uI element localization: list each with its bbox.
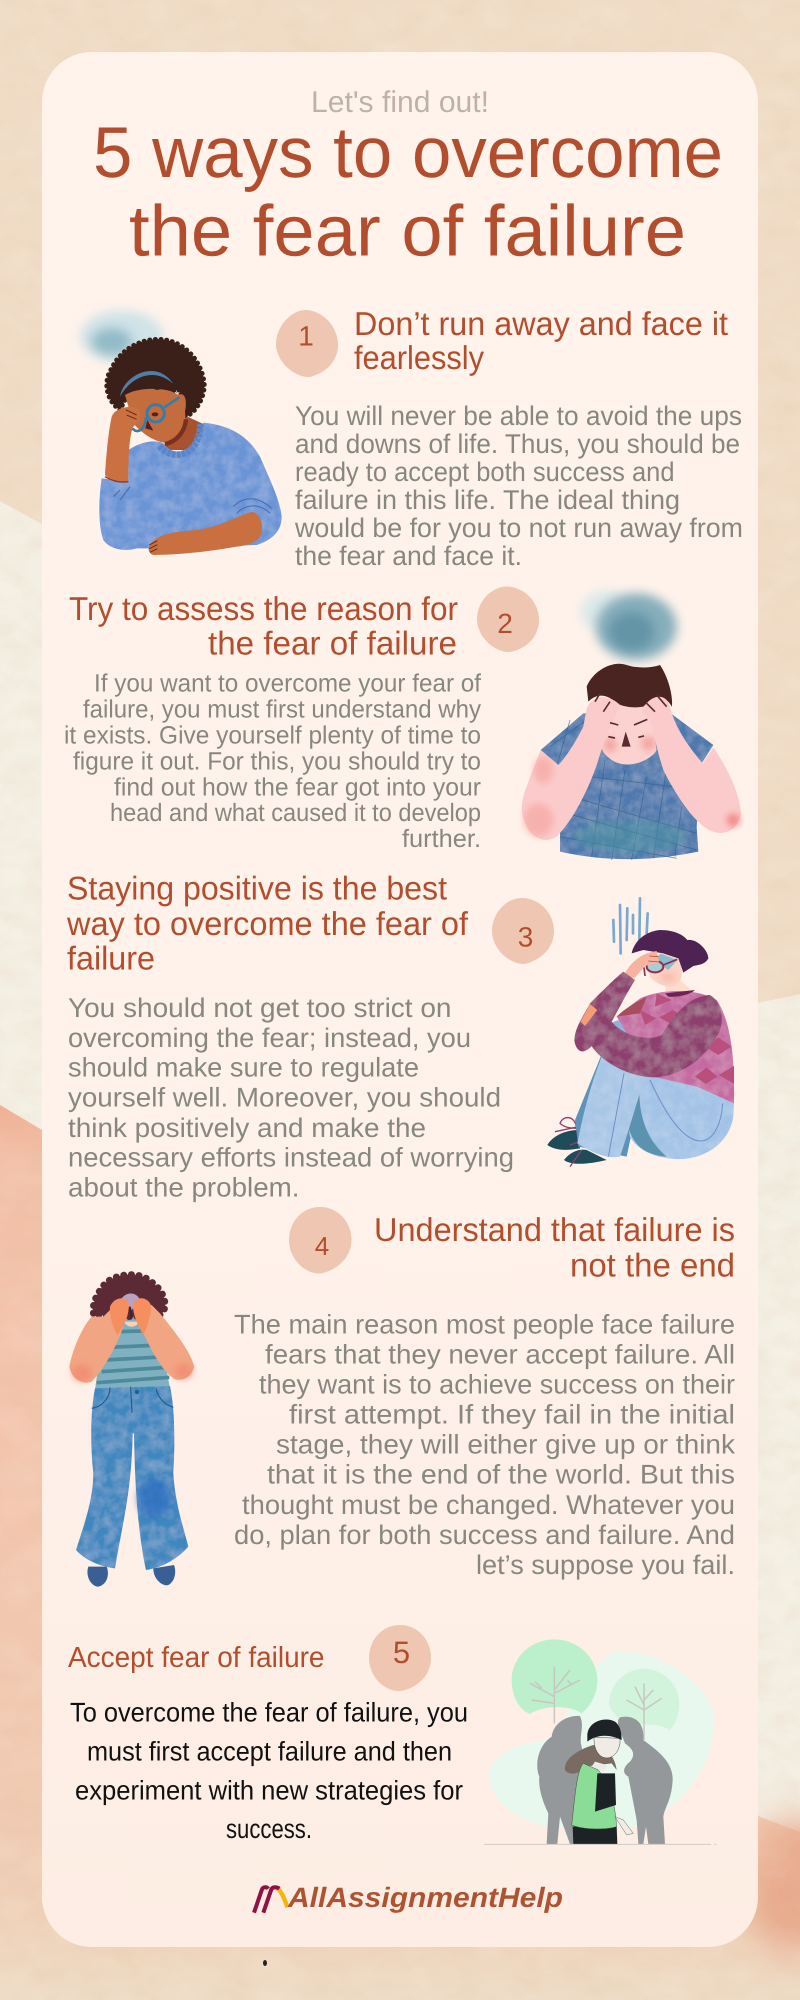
- illustration: person holding head under cloud: [522, 590, 741, 860]
- logo: AllAssignmentHelp: [254, 1882, 563, 1913]
- heading 1: fearlessly: [354, 339, 484, 376]
- panel: step 1: [80, 305, 743, 571]
- heading 4: Understand that failure is: [374, 1211, 735, 1248]
- title: [93, 113, 723, 272]
- illustration: person with cloud and glasses: [80, 311, 282, 555]
- illustration: seated person hugging knees: [547, 898, 734, 1167]
- number badge 2: [477, 586, 539, 652]
- body text 1: the fear and face it.: [295, 541, 522, 571]
- body text 2: head and what caused it to develop: [110, 799, 481, 827]
- body text 1: failure in this life. The ideal thing: [295, 485, 680, 515]
- logo mark: [254, 1887, 287, 1913]
- body text 1: You will never be able to avoid the ups: [295, 401, 742, 431]
- body text 2: find out how the fear got into your: [114, 774, 481, 802]
- heading 4: [374, 1211, 735, 1284]
- number badge 1: 1: [298, 320, 314, 352]
- body text 1: would be for you to not run away from: [294, 513, 743, 543]
- body text 4: they want is to achieve success on their: [259, 1370, 735, 1400]
- panel: step 4: [69, 1207, 736, 1587]
- heading 4: not the end: [570, 1246, 735, 1284]
- body text 2: failure, you must first understand why: [83, 696, 481, 724]
- body text 4: stage, they will either give up or think: [276, 1430, 736, 1460]
- body text 5: experiment with new strategies for: [75, 1776, 463, 1806]
- body text 5: success.: [226, 1814, 312, 1844]
- body text 3: should make sure to regulate: [68, 1052, 419, 1082]
- body text 4: let’s suppose you fail.: [476, 1550, 735, 1580]
- body text 5: [70, 1698, 468, 1844]
- body text 5: To overcome the fear of failure, you: [70, 1698, 468, 1728]
- panel: step 5: [68, 1625, 717, 1844]
- body text 2: further.: [402, 825, 481, 853]
- panel: step 2: [64, 586, 741, 860]
- heading 3: failure: [67, 940, 155, 976]
- number badge 2: 2: [497, 608, 513, 639]
- body text 3: You should not get too strict on: [68, 993, 452, 1023]
- title: the fear of failure: [129, 192, 686, 272]
- body text 1: ready to accept both success and: [295, 457, 674, 487]
- body text 3: think positively and make the: [68, 1113, 426, 1143]
- logo text: AllAssignmentHelp: [287, 1882, 563, 1913]
- body text 3: overcoming the fear; instead, you: [68, 1023, 471, 1053]
- body text 1: [294, 401, 743, 571]
- number badge 5: [369, 1625, 431, 1691]
- body text 4: The main reason most people face failure: [234, 1310, 735, 1340]
- title: 5 ways to overcome: [93, 113, 723, 193]
- heading 3: way to overcome the fear of: [66, 905, 469, 942]
- body text 2: [64, 670, 481, 853]
- body text 4: [234, 1310, 736, 1580]
- heading 1: Don’t run away and face it: [354, 305, 728, 342]
- body text 1: and downs of life. Thus, you should be: [295, 429, 740, 459]
- body text 2: If you want to overcome your fear of: [94, 670, 481, 698]
- heading 3: Staying positive is the best: [67, 870, 447, 906]
- heading 5: Accept fear of failure: [68, 1642, 324, 1674]
- heading 2: the fear of failure: [208, 624, 457, 662]
- body text 4: thought must be changed. Whatever you: [242, 1490, 735, 1520]
- body text 4: first attempt. If they fail in the initial: [289, 1400, 735, 1430]
- number badge 5: 5: [393, 1635, 410, 1670]
- heading 1: [354, 305, 728, 376]
- heading 2: [69, 590, 458, 662]
- body text 3: [68, 993, 514, 1202]
- body text 3: necessary efforts instead of worrying: [68, 1142, 514, 1172]
- number badge 1: [276, 310, 338, 377]
- panel: step 3: [66, 870, 734, 1202]
- kicker: Let's find out!: [311, 86, 489, 119]
- number badge 3: [492, 898, 554, 964]
- number badge 3: 3: [518, 922, 533, 952]
- body text 4: do, plan for both success and failure. And: [234, 1520, 735, 1550]
- body text 5: must first accept failure and then: [87, 1736, 452, 1766]
- body text 4: fears that they never accept failure. All: [265, 1340, 735, 1370]
- header: intro and title: [93, 86, 723, 272]
- illustration: student between shadow figures: [484, 1639, 717, 1844]
- number badge 4: 4: [315, 1231, 329, 1261]
- body text 3: about the problem.: [68, 1172, 300, 1202]
- heading 3: [66, 870, 469, 976]
- number badge 4: [289, 1207, 352, 1274]
- body text 2: it exists. Give yourself plenty of time to: [64, 722, 481, 750]
- body text 4: that it is the end of the world. But this: [267, 1460, 735, 1490]
- illustration: standing person covering face: [69, 1275, 194, 1587]
- body text 2: figure it out. For this, you should try to: [73, 748, 481, 776]
- heading 2: Try to assess the reason for: [69, 590, 458, 627]
- body text 3: yourself well. Moreover, you should: [68, 1082, 501, 1112]
